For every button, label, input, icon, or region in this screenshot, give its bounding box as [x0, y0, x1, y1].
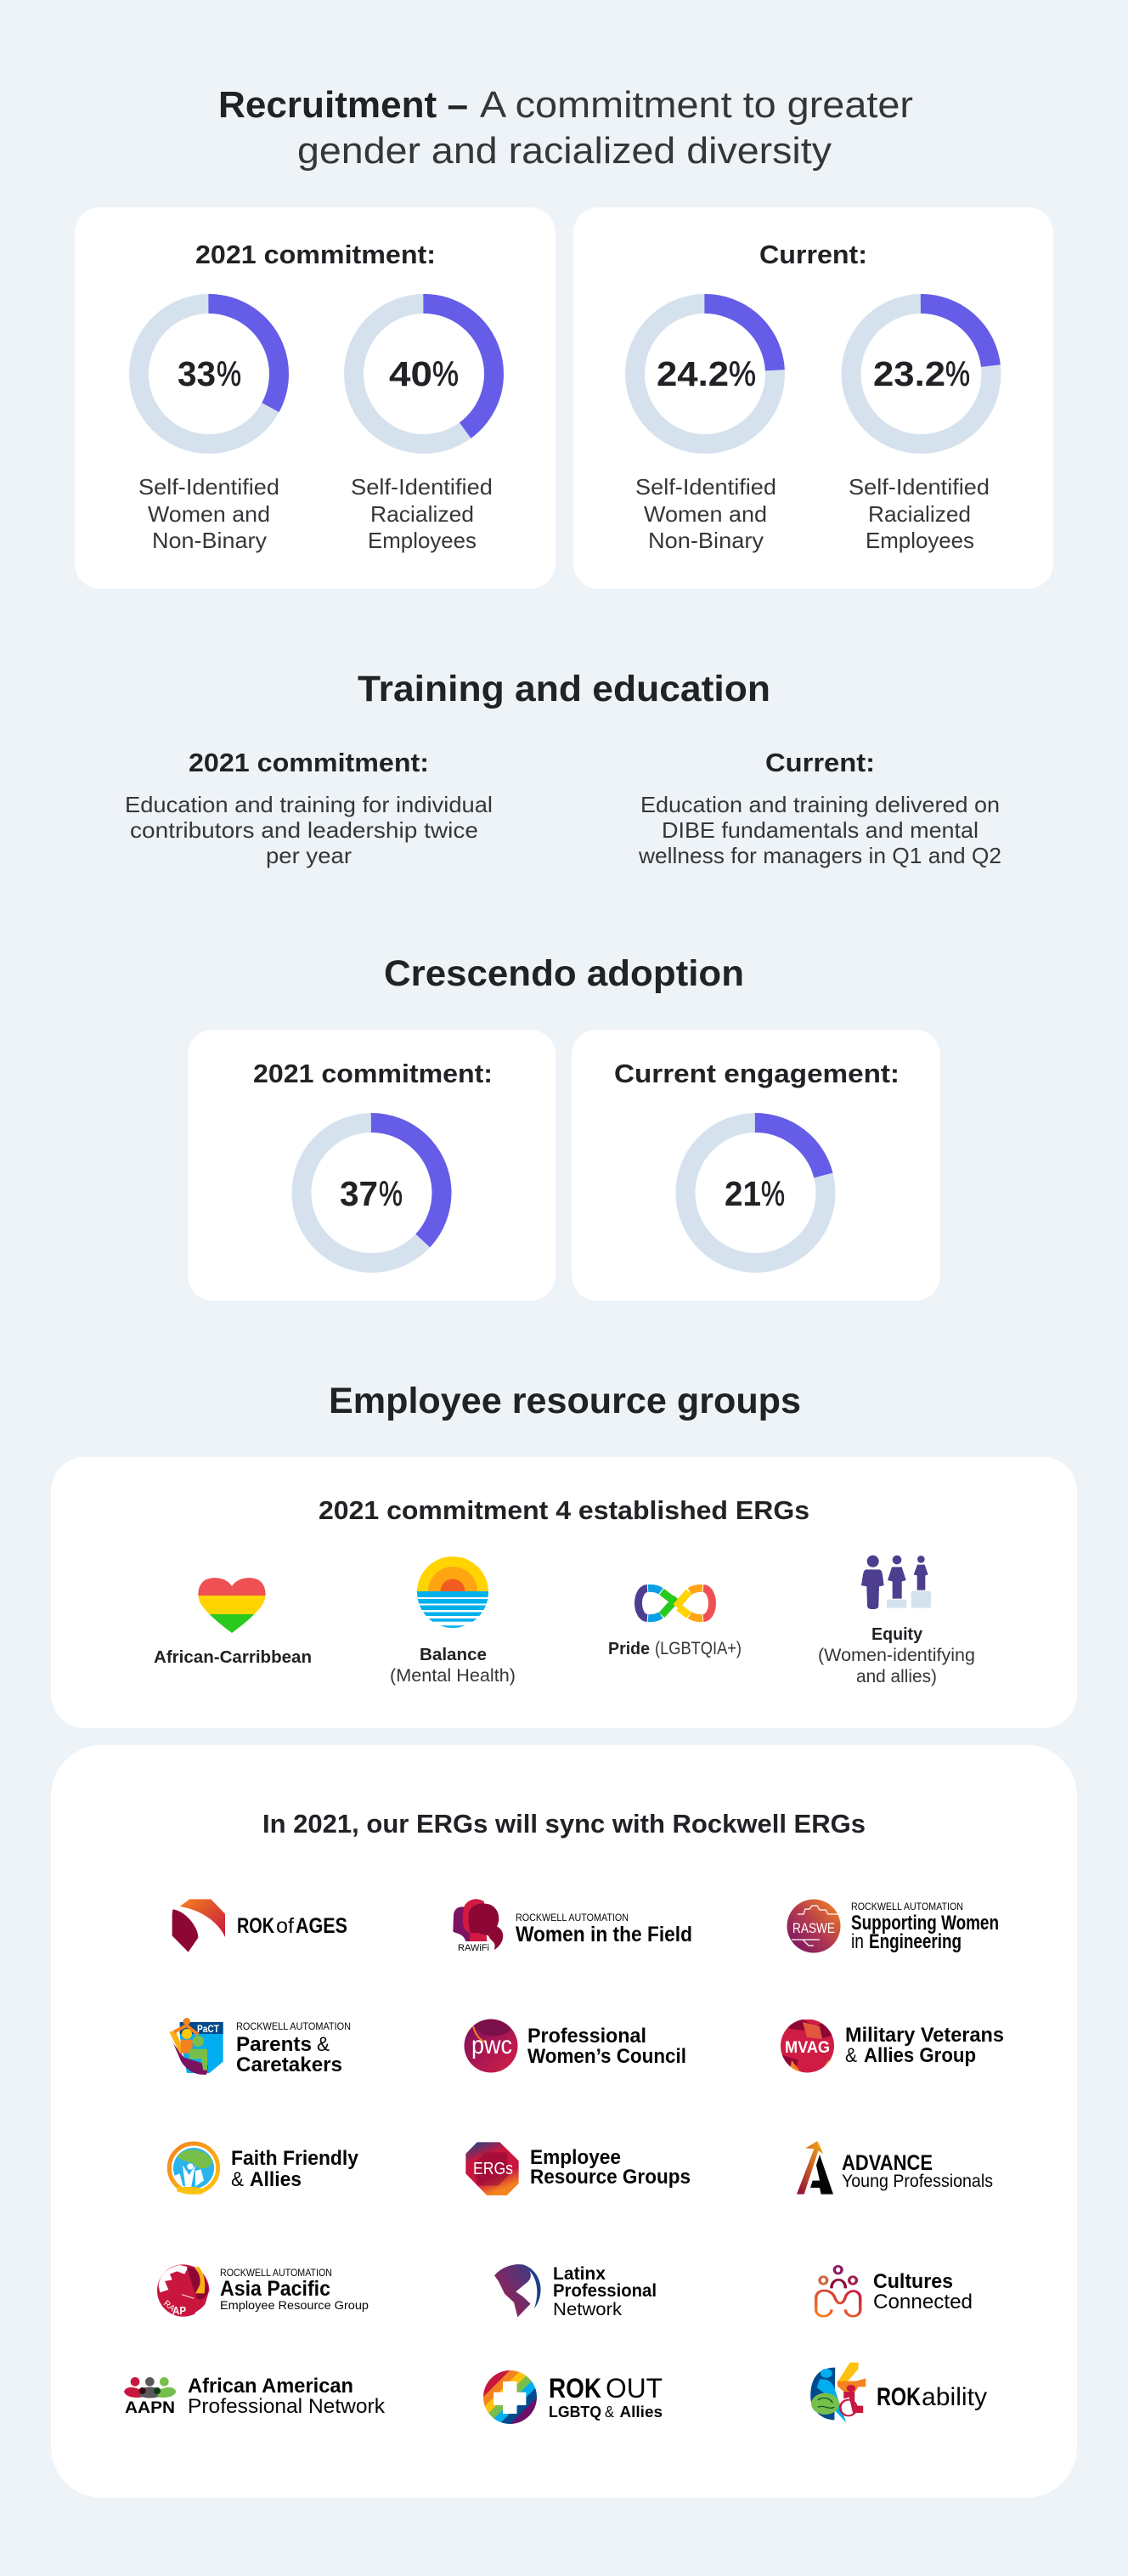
logo: Faith Friendly & Allies: Allies [250, 2168, 302, 2191]
text block: training current [638, 748, 1001, 868]
icon: RASWE badge [787, 1900, 841, 1952]
logo: Employee Resource Groups: ERGs [473, 2160, 513, 2178]
logo: Military Veterans & Allies Group: Military Veterans [845, 2024, 1004, 2047]
logo: Latinx Professional Network: Network [553, 2300, 623, 2319]
heading: crescendo adoption: Crescendo adoption [384, 953, 744, 994]
logo: Parents & Caretakers: & [317, 2033, 330, 2056]
logo: Latinx Professional Network: Professional [553, 2281, 657, 2301]
logo: ROKofAGES: AGES [296, 1914, 347, 1938]
logo: Supporting Women in Engineering: Engineering [869, 1930, 962, 1953]
title: Recruitment – [218, 84, 468, 126]
icon: RAAP globe [157, 2264, 209, 2317]
text block: training 2021 commitment: per year [266, 843, 352, 868]
donut label: Racialized [370, 501, 474, 527]
donut chart: 23.2% [851, 304, 991, 443]
donut label: Women and [644, 501, 767, 527]
donut chart: 40%: % [432, 354, 459, 393]
label: Balance: (Mental Health) [390, 1666, 516, 1686]
logo: Professional Women's Council: Women’s Council [527, 2045, 686, 2068]
logo: African American Professional Network: Professional Network [188, 2395, 386, 2418]
logo: Latinx Professional Network [494, 2264, 657, 2319]
logo: Asia Pacific: AP [172, 2304, 186, 2317]
icon: Balance sun [416, 1556, 489, 1628]
donut chart: 37% [302, 1123, 442, 1263]
logo: Employee Resource Groups: Employee [530, 2146, 621, 2169]
logo: Military Veterans & Allies Group [781, 2020, 1004, 2074]
logo: ROKability: ROK [877, 2383, 921, 2411]
panel heading: Current: [759, 240, 867, 269]
logo: ROKOUT LGBTQ & Allies: ROK [549, 2373, 601, 2404]
panel: 4 established ERGs [51, 1457, 1077, 1728]
donut chart: 24.2%: 24.2 [657, 354, 729, 393]
logo: ROKOUT LGBTQ & Allies: LGBTQ [549, 2404, 601, 2421]
text block: training 2021 commitment: 2021 commitment: [189, 748, 429, 777]
donut chart: 40% [353, 304, 494, 443]
panel: crescendo current engagement [572, 1030, 940, 1301]
icon: pwc badge [464, 2019, 518, 2073]
logo: Faith Friendly & Allies: & [231, 2168, 244, 2191]
donut chart: 40%: 40 [389, 354, 432, 393]
panel: recruitment current [573, 207, 1053, 589]
donut chart: 24.2% [635, 304, 775, 443]
label: Equity [818, 1625, 975, 1686]
donut label: Non-Binary [152, 528, 267, 553]
icon: Latinx globe [494, 2264, 541, 2317]
donut chart: 37%: 37 [340, 1174, 378, 1213]
icon: African-Carribbean heart [198, 1578, 266, 1633]
logo: Asia Pacific: Employee Resource Group [220, 2298, 369, 2312]
icon: Cultures people [816, 2266, 860, 2316]
donut label: Self-Identified [351, 474, 493, 500]
text block: training 2021 commitment: contributors and leadership twice [130, 817, 478, 843]
logo: ROKofAGES: of [276, 1914, 294, 1938]
logo: Women in the Field: ROCKWELL AUTOMATION [516, 1912, 629, 1924]
logo: Latinx Professional Network: Latinx [553, 2264, 606, 2284]
panel: crescendo 2021 commitment [188, 1030, 556, 1301]
logo: Professional Women's Council: Professional [527, 2025, 646, 2048]
donut label: Racialized [868, 501, 971, 527]
icon: ROKOUT rainbow plus [483, 2370, 537, 2424]
title: A commitment to greater [480, 84, 913, 126]
logo: ROKOUT LGBTQ & Allies: OUT [606, 2373, 663, 2404]
panel heading: Current engagement: [614, 1059, 900, 1088]
logo: ROKability: ability [922, 2383, 987, 2411]
label: Pride: Pride [608, 1640, 650, 1658]
panel: Rockwell ERGs [51, 1745, 1077, 2498]
logo: African American Professional Network: African American [188, 2375, 353, 2398]
logo: Asia Pacific: Asia Pacific [220, 2277, 330, 2301]
donut label: Employees [866, 528, 974, 553]
logo: Asia Pacific: ROCKWELL AUTOMATION [220, 2267, 332, 2279]
logo: Supporting Women in Engineering [787, 1900, 999, 1953]
logo: Parents & Caretakers: PaCT [197, 2023, 220, 2035]
icon: Equity people on boxes [861, 1556, 931, 1609]
donut chart: 21%: 21 [725, 1174, 761, 1213]
logo: Women in the Field [453, 1899, 692, 1953]
donut label: Self-Identified [849, 474, 990, 500]
logo: Military Veterans & Allies Group: Allies Group [864, 2044, 976, 2067]
icon: ADVANCE arrow A [797, 2141, 833, 2195]
label: Pride [608, 1639, 742, 1658]
logo: Parents & Caretakers: ROCKWELL AUTOMATION [236, 2020, 351, 2032]
label: Equity: and allies) [856, 1667, 937, 1686]
logo: Professional Women's Council: pwc [471, 2031, 512, 2059]
donut label [351, 474, 493, 553]
logo: ROKOUT LGBTQ & Allies: Allies [620, 2404, 663, 2421]
heading: training and education: Training and education [358, 669, 770, 709]
logo: Cultures Connected [816, 2266, 973, 2316]
logo: ROKOUT LGBTQ & Allies [483, 2370, 663, 2424]
panel heading: 2021 commitment: [195, 240, 436, 269]
donut chart: 33%: % [217, 354, 241, 393]
donut chart: 21% [685, 1123, 826, 1263]
text block: training current: Education and training delivered on [640, 792, 1000, 817]
logo: Faith Friendly & Allies [169, 2144, 359, 2195]
text block: training current: DIBE fundamentals and mental [662, 817, 979, 843]
icon: Faith globe [169, 2144, 218, 2195]
icon: AAPN people [124, 2377, 176, 2398]
logo: African American Professional Network [124, 2375, 386, 2418]
logo: Military Veterans & Allies Group: & [845, 2044, 857, 2067]
label: Balance [390, 1646, 516, 1686]
donut chart: 23.2%: 23.2 [873, 354, 945, 393]
donut label: Self-Identified [138, 474, 279, 500]
icon: RAWiFi profiles [453, 1899, 503, 1950]
donut chart: 33% [139, 304, 279, 443]
logo: Employee Resource Groups [465, 2142, 691, 2195]
panel heading: 2021 commitment: [253, 1059, 493, 1088]
panel: recruitment 2021 commitment [75, 207, 556, 589]
icon: Pride infinity [639, 1588, 712, 1618]
logo: Women in the Field: Women in the Field [516, 1923, 692, 1946]
title [218, 84, 913, 172]
logo: ROKofAGES [172, 1899, 347, 1952]
logo: Supporting Women in Engineering: Supporting Women [851, 1912, 999, 1935]
logo: Supporting Women in Engineering: RASWE [792, 1920, 835, 1936]
label: Equity: (Women-identifying [818, 1646, 975, 1665]
donut label: Women and [148, 501, 270, 527]
logo: Parents & Caretakers: Parents [236, 2033, 312, 2056]
icon: ROKability figures [810, 2363, 866, 2423]
logo: Supporting Women in Engineering: ROCKWELL AUTOMATION [851, 1901, 963, 1912]
text block: training current: wellness for managers in Q1 and Q2 [638, 843, 1001, 868]
logo: ROKability [810, 2363, 987, 2423]
icon: ROKofAGES shield [172, 1899, 225, 1952]
text block: training current: Current: [765, 748, 875, 777]
logo: African American Professional Network: AAPN [125, 2399, 175, 2417]
logo: ROKOUT LGBTQ & Allies: & [605, 2404, 614, 2421]
panel heading: In 2021, our ERGs will sync with Rockwell ERGs [262, 1809, 866, 1839]
donut label: Non-Binary [648, 528, 764, 553]
label: Equity: Equity [871, 1625, 923, 1644]
donut chart: 24.2%: % [729, 354, 756, 393]
logo: Supporting Women in Engineering: in [851, 1930, 864, 1953]
donut label [849, 474, 990, 553]
icon: MVAG badge [781, 2020, 835, 2074]
donut chart: 23.2%: % [945, 354, 970, 393]
logo: ADVANCE Young Professionals: Young Professionals [842, 2172, 993, 2191]
donut chart: 21%: % [761, 1174, 785, 1213]
logo: ADVANCE Young Professionals [797, 2141, 993, 2195]
heading: employee resource groups: Employee resource groups [329, 1381, 801, 1421]
icon: PaCT shield [169, 2018, 223, 2075]
logo: Cultures Connected: Connected [873, 2291, 973, 2313]
donut chart: 37%: % [379, 1174, 403, 1213]
logo: Cultures Connected: Cultures [873, 2270, 953, 2293]
logo: ADVANCE Young Professionals: ADVANCE [842, 2151, 933, 2175]
logo: Employee Resource Groups: Resource Groups [530, 2166, 691, 2189]
label: Pride: (LGBTQIA+) [655, 1639, 742, 1658]
logo: Women in the Field: RAWiFi [458, 1943, 489, 1953]
donut label: Self-Identified [635, 474, 776, 500]
logo: Asia Pacific [157, 2264, 369, 2317]
donut chart: 33%: 33 [178, 354, 216, 393]
donut label: Employees [368, 528, 477, 553]
logo: Military Veterans & Allies Group: MVAG [785, 2039, 830, 2057]
icon: ERGs octagon [465, 2142, 519, 2195]
label: Balance: Balance [420, 1646, 487, 1664]
logo: Asia Pacific: RA [161, 2299, 177, 2314]
donut label [138, 474, 279, 553]
logo: ROKofAGES: ROK [237, 1914, 274, 1938]
label: African-Carribbean: African-Carribbean [154, 1648, 312, 1667]
logo: Parents & Caretakers: Caretakers [236, 2053, 342, 2076]
donut label [635, 474, 776, 553]
text block: training 2021 commitment: Education and training for individual [125, 792, 493, 817]
logo: Parents & Caretakers [169, 2018, 351, 2076]
panel heading: 2021 commitment 4 established ERGs [319, 1495, 809, 1525]
text block: training 2021 commitment [125, 748, 493, 868]
logo: Professional Women's Council [464, 2019, 686, 2073]
logo: Faith Friendly & Allies: Faith Friendly [231, 2147, 359, 2170]
title: gender and racialized diversity [297, 130, 832, 172]
